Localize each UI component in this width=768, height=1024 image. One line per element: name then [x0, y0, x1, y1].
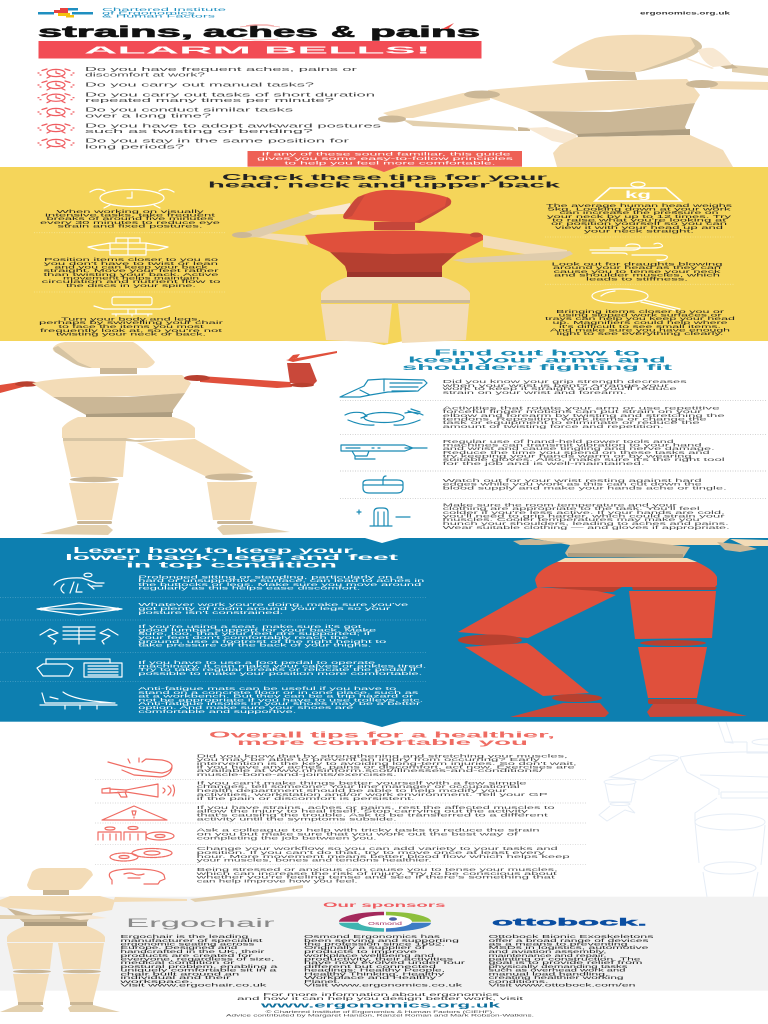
heading: lower back: in top condition — [126, 559, 337, 569]
text: positioning items: Position items closer to you so — [44, 257, 220, 262]
text: prolonged sitting: hard or unsupportive surface, can lead to aches in — [138, 578, 426, 583]
text: Ottobock sponsor: MSDs in logistics, automotive — [488, 945, 650, 950]
text: draughts: and shoulder muscles, which — [554, 272, 722, 277]
text: Ottobock sponsor: offer a broad range of devices — [488, 938, 648, 943]
text: prolonged sitting — [138, 574, 426, 590]
text: room temperature: muscles. Cooler temperatures may make you — [443, 517, 702, 522]
text: positioning items: the discs in your spine. — [66, 283, 196, 288]
heading: lower back: lower back, legs and feet — [65, 552, 398, 562]
text: more information — [237, 992, 526, 1001]
text: anti-fatigue mats: comfortable and supportive. — [138, 709, 296, 714]
text: Ottobock sponsor: and aviation assembly, — [488, 949, 607, 954]
text: turn your body: frequently look at, so you're not — [40, 328, 225, 333]
icon: power drill — [341, 445, 427, 459]
text: draughts: around your head as they can — [553, 265, 723, 270]
text: power tools — [443, 439, 725, 466]
icon: gears — [110, 848, 172, 861]
title: strains, aches & pains: pains — [370, 24, 480, 41]
title: strains, aches & pains — [38, 24, 480, 41]
text: power tools: suitable gloves. Also, make sure it's the right tool — [443, 457, 725, 462]
text: Ottobock sponsor: Visit www.ottobock.com/en — [488, 982, 637, 987]
text: visual tasks: breaks of around five minutes — [46, 216, 214, 221]
text: draughts: leads to stiffness. — [586, 276, 688, 281]
text: Ergochair sponsor: Visit www.ergochair.co.uk — [120, 982, 269, 987]
icon: rotating arrows — [345, 409, 423, 425]
heading: lower back — [65, 545, 398, 569]
heading: overall tips: more comfortable you — [237, 737, 528, 747]
text: more information: For more information about ergonomics — [263, 992, 499, 997]
text: grip strength: work to keep it straight and you'll reduce — [443, 386, 679, 391]
text: head weight: to raise what you're looking at — [552, 217, 729, 222]
text: tell someone: if the pain or discomfort is persistent. — [197, 796, 415, 801]
text: bringing items closer — [545, 309, 737, 336]
figure: back view with red upper body — [232, 190, 573, 343]
panel: lower back, legs and feet — [0, 538, 768, 727]
text: Ergochair sponsor — [120, 934, 279, 987]
title: strains, aches & pains: aches — [203, 24, 318, 41]
text: bringing items closer: using sloped work surfaces or — [558, 312, 723, 317]
panel: sponsors — [0, 897, 768, 991]
text: Osmond sponsor: workplace wellbeing and — [304, 953, 436, 958]
icon: thermometer — [357, 508, 410, 526]
text: Osmond sponsor: Workplace and Healthy — [304, 975, 439, 980]
text: website: ergonomics.org.uk — [640, 10, 731, 16]
text: Ottobock sponsor: physically demanding tasks — [488, 964, 628, 969]
figure: standing mannequin bottom left — [0, 868, 303, 1012]
logo: ottobock: ottobock. — [492, 918, 648, 928]
text: positioning items: circulation and nutrient flow to — [42, 279, 223, 284]
panel: head, neck and upper back — [0, 167, 768, 345]
icon: head with brain — [109, 869, 165, 884]
text: seat support: sure, too, that your feet are supported; if — [138, 631, 373, 636]
text: power tools: Regular use of hand-held power tools and — [443, 439, 676, 444]
text: head weight: view it with your head up and — [555, 225, 725, 230]
text: anti-fatigue mats: option. And make sure your shoes are — [138, 705, 355, 710]
text: room around legs: Whatever work you're doing, make sure you've — [138, 602, 410, 607]
text: anti-fatigue mats — [138, 686, 423, 714]
figure: red legs — [458, 538, 768, 717]
text: stress: which can increase the risk of injury. Try to be conscious about — [197, 871, 559, 876]
text: prolonged sitting: the buttocks or legs. Make sure you move around — [138, 582, 423, 587]
text: prolonged sitting: regularly as this helps ease discomfort. — [138, 585, 360, 590]
text: seat support: good lumbar support for your back. Make — [138, 627, 378, 632]
logo: Ergochair: Ergochair — [126, 918, 275, 930]
text: Ottobock sponsor: maintenance and repair, — [488, 953, 606, 958]
text: ask a colleague: Ask a colleague to help with tricky tasks to reduce the strain — [197, 827, 542, 832]
text: foot pedal: Try to take regular breaks or relocate the pedal if — [138, 667, 419, 672]
logo: Chartered Institute of Ergonomics & Human Factors — [38, 7, 228, 19]
text: questions: Do you have frequent aches, pains or — [85, 67, 357, 73]
text: questions: discomfort at work? — [85, 73, 205, 79]
text: Ottobock sponsor: goal is to provide relief from — [488, 960, 644, 965]
text: visual tasks: intensive tasks, take frequent — [45, 212, 218, 217]
text: seat support: ground, use a footrest of the right height to — [138, 639, 388, 644]
icons: alarm clocks — [38, 69, 74, 148]
text: rest muscles: If you have strains, aches or pains, rest the affected muscles to — [197, 805, 557, 810]
icon: hand grip — [340, 379, 427, 397]
text: Ergochair sponsor: postural problem, enabling a — [120, 964, 279, 969]
text: room temperature: clothing are appropriate to the task. You'll feel — [443, 506, 700, 511]
logo: Osmond ring — [339, 912, 431, 932]
footer — [226, 992, 534, 1018]
text: Ottobock sponsor: Ottobock Bionic Exoskeletons — [488, 934, 654, 939]
text: change workflow: Change your workflow so you can add variety to your tasks and — [197, 846, 560, 851]
text: rotate arm: tendons. Reposition work items or change the — [443, 416, 709, 421]
text: Osmond sponsor: Planet. — [304, 979, 340, 984]
text: visual tasks — [40, 209, 222, 228]
text: Osmond sponsor: headings: Healthy People, — [304, 967, 445, 972]
icon: kg weight: kg — [625, 190, 651, 201]
text: rotate arm: task or equipment to eliminate or reduce the — [443, 420, 702, 425]
text: Ergochair sponsor: Ergochair is the leading — [120, 934, 250, 939]
text: foot pedal: possible to make your position more comfortable. — [138, 671, 422, 676]
text: questions — [85, 67, 381, 150]
text: Ergochair sponsor: individual and their — [120, 975, 232, 980]
text: rotate arm: elbow and forearm by twisting and stretching the — [443, 413, 727, 418]
title: strains, aches & pains: & — [331, 24, 355, 41]
icon: office chair — [94, 297, 170, 316]
text: Ergochair sponsor: manufacturer of specialist — [120, 938, 265, 943]
text: Ottobock sponsor: creating healthier working — [488, 975, 625, 980]
text: more information: and how it can help you design better work, visit — [237, 996, 526, 1001]
text: power tools: Reduce the time you spend on these tasks and — [443, 450, 712, 455]
text: draughts — [552, 261, 725, 281]
text: strengthening: you may be able to prevent an injury from occurring? Early — [197, 757, 543, 762]
text: head weight: your neck straight. — [584, 228, 694, 233]
icon: computer mouse — [363, 476, 403, 493]
text: stress: Being stressed or anxious can cause you to tense your muscles, — [197, 867, 558, 872]
callout: familiar: gives you some easy-to-follow principles — [257, 156, 513, 161]
text: Ottobock sponsor: as a means to preventing — [488, 941, 629, 946]
heading: head, neck and upper back: head, neck and upper back — [208, 180, 561, 190]
text: room temperature — [443, 502, 730, 530]
text: Ergochair sponsor: medical condition or — [120, 960, 236, 965]
text: room temperature: Make sure the room temperature and your — [443, 502, 678, 507]
text: strengthening — [197, 753, 577, 777]
text: bringing items closer: trays can help you keep your head — [545, 316, 737, 321]
text: questions: Do you carry out manual tasks? — [85, 82, 314, 88]
panel: alarm bells intro — [38, 7, 768, 172]
text: Osmond sponsor: productivity, their activities — [304, 956, 453, 961]
text: bringing items closer: up. Magnifiers could help where — [552, 320, 729, 325]
icon: megaphone — [102, 784, 174, 797]
text: draughts: cause you to tense your neck — [554, 269, 723, 274]
text: rotate arm: forceful finger motions can put strain on your — [443, 409, 704, 414]
heading: head, neck and upper back: Check these tips for your — [222, 172, 549, 182]
text: anti-fatigue mats: not be appropriate if you have to use trolleys, etc. — [138, 697, 423, 702]
banner: alarm bells: ALARM BELLS! — [84, 44, 431, 56]
text: strengthening: muscle-bone-and-joints/exercises. — [197, 772, 397, 777]
icon: magnifier — [592, 289, 680, 310]
panel: arms and shoulders — [0, 342, 767, 535]
text: seat support: If you're using a seat, make sure it's got — [138, 624, 364, 629]
icon: kg weight — [595, 182, 681, 201]
text: turn your body: twisting your neck or back. — [56, 331, 206, 336]
text: Osmond sponsor: products to improve — [304, 949, 419, 954]
text: head weight: The average human head weighs — [546, 203, 732, 208]
text: tell someone: health department should be able to help modify your — [197, 788, 509, 793]
text: foot pedal: machinery, it can make your calves or ankles tired. — [138, 663, 426, 668]
text: seat support: take pressure off the back of your thighs. — [138, 642, 371, 647]
text: questions: over a long time? — [85, 113, 211, 119]
text: power tools: and wrist and cause tingling and nerve damage. — [443, 446, 715, 451]
text: Ottobock sponsor: manual load handling, — [488, 971, 608, 976]
text: Osmond sponsor: Osmond Ergonomics has — [304, 934, 440, 939]
text: room around legs — [138, 602, 410, 615]
text: tell someone: changes, tell someone. Your line manager or occupational — [197, 784, 520, 789]
text: anti-fatigue mats: at a workbench. But they can be a trip hazard or — [138, 693, 415, 698]
text: room around legs: got plenty of room around your legs so your — [138, 606, 392, 611]
callout: familiar: to help you feel more comfortable. — [284, 160, 496, 166]
text: rotate arm — [443, 405, 727, 429]
text: ask a colleague: completing the job between you. — [197, 835, 377, 840]
icon: alarm clock — [90, 189, 174, 208]
text: rest muscles: that's causing the trouble. Ask to be transferred to a different — [197, 812, 550, 817]
heading: overall tips — [209, 730, 555, 747]
heading: our sponsors: Our sponsors — [323, 902, 447, 909]
text: draughts: Look out for draughts blowing — [552, 261, 725, 266]
text: wrist resting: Watch out for your wrist resting against hard — [443, 478, 704, 483]
callout: familiar: If any of these sound familiar, this guide — [262, 152, 513, 156]
text: tell someone: If you can't make things better yourself with a few simple — [197, 780, 529, 785]
heading: arms and shoulders: Find out how to — [434, 348, 640, 358]
title: strains, aches & pains: strains, — [38, 24, 193, 41]
text: Osmond sponsor: the profession since 1992. — [304, 941, 445, 946]
text: web address: www.ergonomics.org.uk — [258, 1000, 502, 1009]
text: head weight: can increase the pressure on — [560, 210, 720, 215]
text: bringing items closer: it's difficult to see small items. — [559, 324, 721, 329]
logo: Chartered Institute of Ergonomics & Human Factors: Chartered Institute — [102, 7, 228, 12]
text: turn your body: Turn your body and legs, — [61, 316, 201, 321]
text: stress — [197, 867, 559, 883]
text: power tools: machines can transmit vibration to your hand — [443, 442, 704, 447]
text: grip strength: strain on your wrist and forearm. — [443, 390, 627, 395]
heading: arms and shoulders — [402, 348, 672, 372]
text: Ottobock sponsor: painting or construction. The — [488, 956, 642, 961]
text: Osmond sponsor: different but connected — [304, 964, 438, 969]
text: tell someone: activities, workstation and/or work environment. Tell your GP — [197, 792, 548, 797]
text: head weight — [546, 203, 734, 233]
text: wrist resting — [443, 478, 727, 490]
text: room temperature: colder if you're less active. If your hands are cold, — [443, 510, 725, 515]
text: Osmond sponsor: have now evolved under four — [304, 960, 467, 965]
text: credits: Advice contributed by Margaret Hanson, Ranzel Roman and Mark Robson-Watkins. — [226, 1014, 534, 1018]
text: anti-fatigue mats: stand on a concrete floor or in one place, such as — [138, 690, 418, 695]
text: visual tasks: every 30 minutes to reduce eye — [40, 220, 222, 225]
text: foot pedal — [138, 660, 426, 676]
text: Osmond sponsor: Healthy Thinking, Healthy — [304, 971, 447, 976]
text: rest muscles: activity until the symptoms subside. — [197, 816, 397, 821]
text: Ergochair sponsor: everyone, regardless of size, — [120, 956, 274, 961]
text: bringing items closer: light to see everything clearly. — [556, 331, 724, 336]
text: change workflow: your muscles, bones and tendons healthier. — [197, 857, 432, 862]
text: seat support: your feet don't comfortably reach the — [138, 635, 350, 640]
text: rest muscles — [197, 805, 557, 821]
text: tell someone — [197, 780, 548, 801]
text: strengthening: if you have any aches, pains or discomfort, act now. Exercises are — [197, 764, 577, 769]
text: questions: Do you have to adopt awkward postures — [85, 123, 381, 129]
text: questions: repeated many times per minute? — [85, 98, 334, 104]
text: anti-fatigue mats: Anti-fatigue insoles in your shoes may be a better — [138, 701, 422, 706]
text: head weight: 5kg. Looking down at your work — [548, 206, 733, 211]
icon: seated person — [54, 573, 104, 593]
callout: familiar — [248, 151, 522, 172]
text: bringing items closer: And make sure you have enough — [550, 327, 732, 332]
text: Ergochair sponsor: uniquely comfortable sit in a — [120, 967, 278, 972]
text: questions: long periods? — [85, 144, 184, 150]
text: turn your body — [39, 316, 225, 336]
heading: arms and shoulders: keep your arms and — [408, 355, 666, 365]
text: strengthening: available at www.nhsinform.scot/illnesses-and-conditions/ — [197, 768, 545, 773]
icon: foot pedal bags — [37, 659, 122, 677]
text: questions: Do you stay in the same position for — [85, 139, 349, 145]
text: Osmond sponsor — [304, 934, 467, 987]
text: grip strength: when your wrist is bent? Arrange your — [443, 383, 671, 388]
heading: arms and shoulders: shoulders fighting fit — [402, 362, 672, 372]
icon: people and gears — [98, 826, 174, 840]
text: change workflow: position. If you can't do that, try to move once at least every — [197, 850, 548, 855]
text: room around legs: posture isn't constrained. — [138, 610, 283, 615]
text: grip strength — [443, 379, 687, 395]
text: positioning items: and you can keep your back — [54, 264, 210, 269]
heading: overall tips: Overall tips for a healthier, — [209, 730, 555, 740]
text: change workflow — [197, 846, 572, 862]
text: credits: © Chartered Institute of Ergonomics & Human Factors (CIEHF). — [266, 1010, 494, 1014]
text: room temperature: you'll need to grip harder, which could strain your — [443, 513, 727, 518]
text: rotate arm: amount of twisting force and repetition. — [443, 424, 664, 429]
logo: Chartered Institute of Ergonomics & Human Factors: of Ergonomics — [102, 10, 198, 15]
icon: wind — [590, 243, 667, 260]
text: positioning items: you don't have to twist or lean — [44, 261, 220, 266]
text: prolonged sitting: Prolonged sitting or standing, particularly on a — [138, 574, 405, 579]
text: Ergochair sponsor: chair built around an — [120, 971, 241, 976]
text: visual tasks: strain and fixed postures. — [58, 223, 202, 228]
text: strengthening: Did you know that by strengthening and stretching your muscles, — [197, 753, 568, 758]
text: ask a colleague: on you but make sure that you work out the best way of — [197, 831, 520, 836]
text: stress: whether you're feeling tense and see if there's something that — [197, 874, 557, 879]
figure: standing with red arms — [0, 342, 337, 535]
heading: lower back: Learn how to keep your — [73, 545, 355, 555]
icon: seat adjusted by hands — [40, 627, 118, 644]
figure: side view rubbing neck — [378, 35, 768, 167]
text: positioning items: than twisting your back. Active — [44, 272, 221, 277]
text: seat support — [138, 624, 388, 647]
text: foot pedal: If you have to use a foot pedal to operate — [138, 660, 377, 665]
icon: title accents — [240, 23, 454, 40]
text: questions: Do you conduct similar tasks — [85, 108, 293, 114]
text: wrist resting: blood supply and make your hands ache or tingle. — [443, 485, 727, 490]
heading: head, neck and upper back — [208, 172, 561, 190]
text: questions: Do you carry out tasks of short duration — [85, 93, 375, 99]
icon: boxes — [88, 238, 168, 255]
text: bringing items closer: Bringing items closer to you or — [556, 309, 726, 314]
text: stress: can help improve how you feel. — [197, 878, 358, 883]
text: Ergochair sponsor: Europe. Designed and — [120, 945, 239, 950]
text: grip strength: Did you know your grip strength decreases — [443, 379, 687, 384]
text: Ottobock sponsor: conditions. — [488, 979, 548, 984]
text: head weight: or position yourself so you can — [551, 221, 729, 226]
text: turn your body: to face the items you most — [58, 324, 206, 329]
text: Ottobock sponsor — [488, 934, 654, 987]
text: Ergochair sponsor: ergonomic seating across — [120, 941, 254, 946]
text: room temperature: hunch your shoulders, leading to aches and pains. — [443, 521, 729, 526]
text: ask a colleague — [197, 827, 542, 840]
text: positioning items — [42, 257, 223, 288]
text: Ergochair sponsor: handcrafted in the UK, their — [120, 949, 266, 954]
text: turn your body: perhaps by swivelling your chair — [39, 320, 225, 325]
text: Osmond sponsor: Originally a supplier of — [304, 945, 427, 950]
text: wrist resting: edges while you work as this can cut down the — [443, 481, 704, 486]
text: rotate arm: Activities that rotate your arm or use repetitive — [443, 405, 722, 410]
text: rest muscles: allow the injury to heal itself. Stop carrying out the activity — [197, 808, 531, 813]
figure: faint outline mannequin — [599, 722, 768, 897]
text: room temperature: Wear suitable clothing — and gloves if appropriate. — [443, 525, 730, 530]
text: visual tasks: When working on visually — [56, 209, 206, 214]
text: Osmond sponsor: Visit www.ergonomics.co.uk — [304, 982, 465, 987]
text: Ergochair sponsor: products are created for — [120, 953, 254, 958]
icon: shoe on mat — [40, 692, 117, 709]
logo: Osmond ring: Osmond — [368, 921, 403, 926]
text: Osmond sponsor: been serving and supporting — [304, 938, 461, 943]
text: power tools: try keeping your hands warm or by wearing — [443, 453, 694, 458]
text: head weight: your neck by up to 12 times. Try — [547, 214, 734, 219]
text: strengthening: intervention is the key to avoiding long-term injuries. So don't wait, — [197, 761, 577, 766]
icon: open space — [37, 603, 122, 615]
text: Ergochair sponsor: workspace. — [120, 979, 193, 984]
text: power tools: for the job and is well-maintained. — [443, 461, 645, 466]
text: questions: such as twisting or bending? — [85, 129, 313, 135]
text: anti-fatigue mats: Anti-fatigue mats can be useful if you have to — [138, 686, 398, 691]
icon: flexed arm — [108, 758, 172, 777]
icon: warning triangle — [102, 806, 167, 820]
banner: alarm bells — [38, 41, 482, 58]
panel: overall tips — [95, 722, 768, 897]
text: change workflow: hour. More movement means better blood flow which helps keep — [197, 854, 572, 859]
text: positioning items: straight. Move your feet rather — [44, 268, 220, 273]
text: positioning items: movement helps maintain — [63, 275, 201, 280]
text: credits — [226, 1010, 534, 1018]
logo: Chartered Institute of Ergonomics & Human Factors: & Human Factors — [102, 14, 218, 19]
text: Ottobock sponsor: such as overhead work and — [488, 967, 627, 972]
